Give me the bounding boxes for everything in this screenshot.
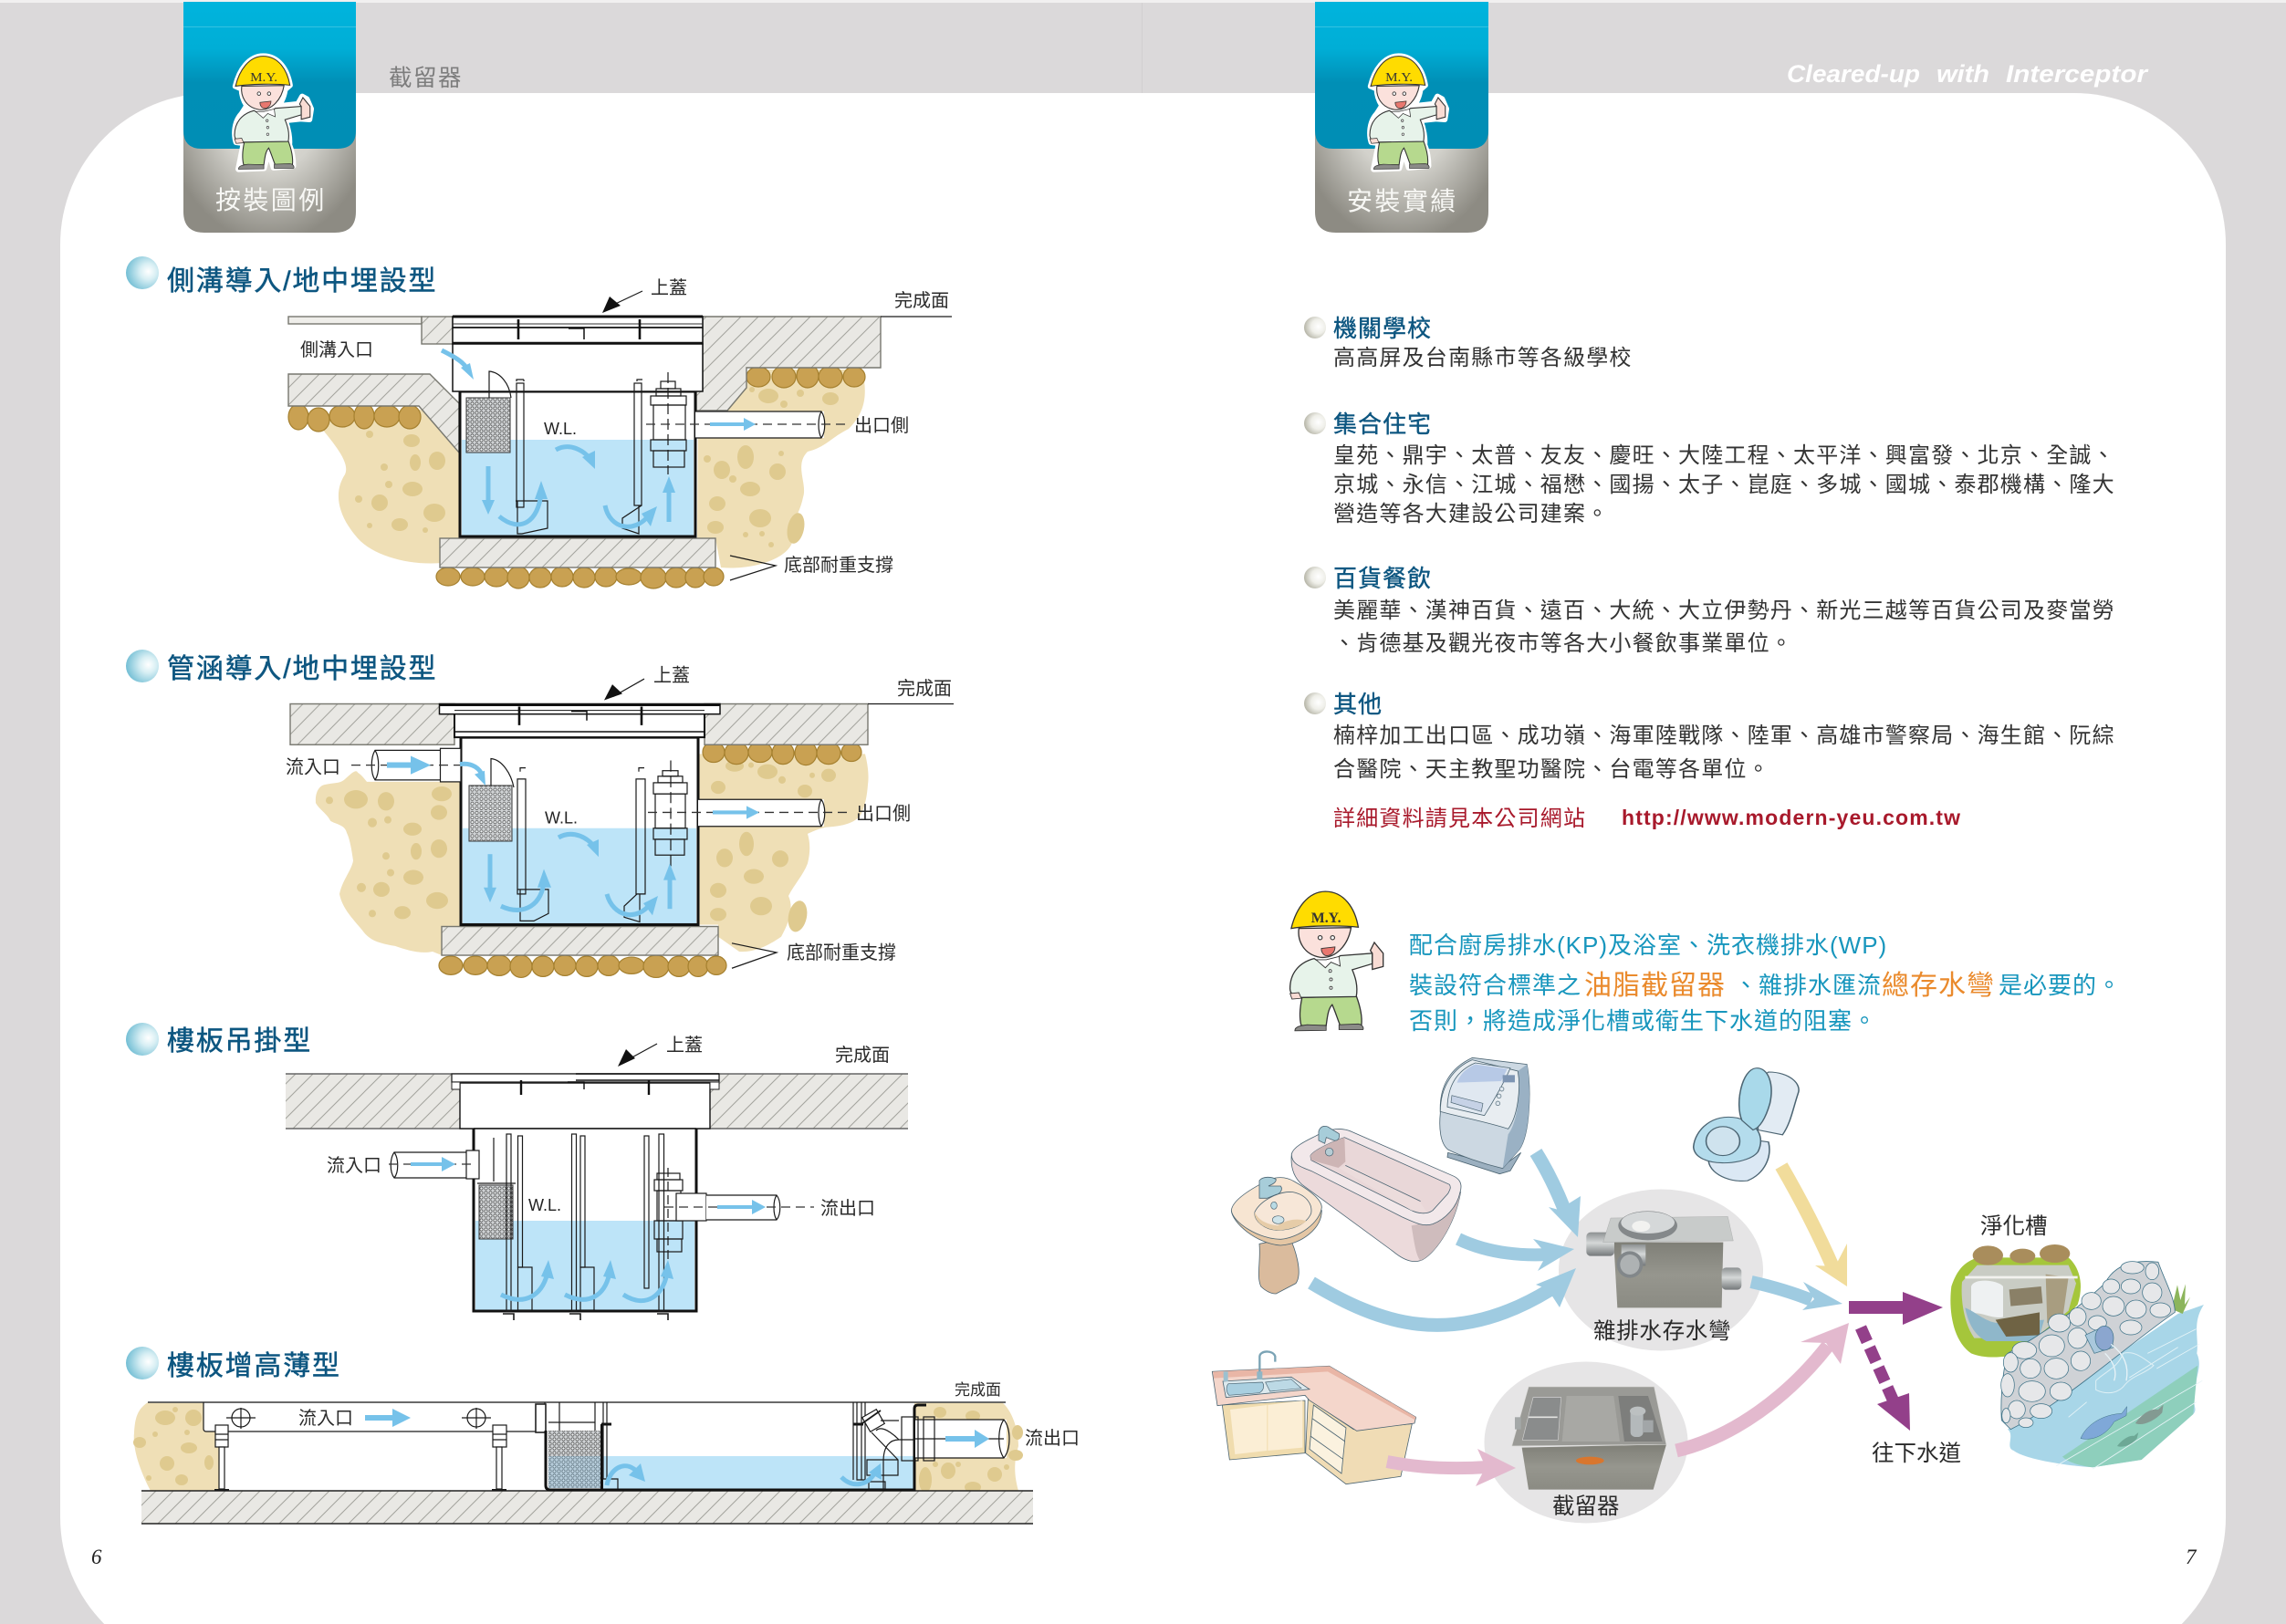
list: others: 合醫院、天主教聖功醫院、台電等各單位。 <box>1333 757 1770 782</box>
fitting <box>654 1168 683 1259</box>
icon: mascot: M.Y. <box>1385 70 1413 84</box>
flow arrows <box>460 764 676 915</box>
illustration: wash basin <box>1231 1177 1321 1294</box>
tank <box>461 737 698 924</box>
labels <box>300 277 949 576</box>
list: institutions and schools: 機關學校 <box>1333 315 1432 342</box>
labels: 完成面 <box>897 678 952 699</box>
diagram 1: side ditch inlet, underground <box>288 277 952 588</box>
stone wall <box>2001 1262 2175 1430</box>
right section tab <box>1315 2 1488 233</box>
callout text: 油脂截留器 <box>1584 971 1726 1001</box>
flow arrows <box>442 350 675 526</box>
left section tab <box>183 2 356 233</box>
lid arrow <box>627 1044 657 1060</box>
arrow: kitchen to interceptor <box>1387 1449 1516 1486</box>
inlet pipe <box>351 748 473 782</box>
callout text: 是必要的。 <box>1999 972 2122 999</box>
caption: 雜排水存水彎 <box>1593 1318 1731 1344</box>
list: others: 其他 <box>1333 691 1383 718</box>
list: retail and dining <box>1304 565 2115 656</box>
outlet pipe <box>902 1417 1009 1461</box>
label: purification tank: 淨化槽 <box>1980 1213 2048 1239</box>
diagram 4: raised thin type <box>133 1381 1080 1524</box>
callout text: 配合廚房排水(KP)及浴室、洗衣機排水(WP) <box>1409 932 1887 959</box>
callout text: 裝設符合標準之 <box>1409 972 1581 999</box>
heading: side ditch type: 側溝導入/地中埋設型 <box>167 266 437 297</box>
flow arrows <box>501 1260 673 1301</box>
illustration: washing machine <box>1440 1057 1529 1174</box>
page number 7: 7 <box>2186 1546 2197 1568</box>
callout text: 總存水彎 <box>1882 971 1995 1001</box>
illustration: toilet <box>1694 1068 1799 1181</box>
sand <box>134 1402 219 1491</box>
heading: slab hanging type <box>126 1023 312 1057</box>
list: residential: 集合住宅 <box>1333 411 1432 438</box>
diagram 2: culvert inlet, underground <box>286 665 954 977</box>
labels <box>286 665 952 963</box>
list: institutions and schools <box>1304 315 1633 370</box>
tab label: 按裝圖例 <box>215 186 327 214</box>
fish <box>2081 1407 2127 1439</box>
inner screen basket <box>466 398 510 453</box>
list: residential: 京城、永信、江城、福懋、國揚、太子、崑庭、多城、國城、泰郡機構、隆大 <box>1333 473 2115 497</box>
header title right: Interceptor <box>2006 60 2149 88</box>
cover and riser <box>452 1074 719 1129</box>
list: residential <box>1304 411 2115 526</box>
tank <box>460 391 695 536</box>
outlet pipe <box>648 799 851 827</box>
grass <box>2168 1284 2190 1314</box>
labels: 出口側 <box>854 415 909 436</box>
tab label: 安裝實績 <box>1347 187 1458 215</box>
caption: 截留器 <box>1552 1494 1619 1519</box>
floor <box>141 1491 1033 1524</box>
labels: W.L. <box>528 1196 561 1214</box>
ground slabs <box>290 704 868 955</box>
supports <box>214 1425 506 1490</box>
labels: W.L. <box>544 420 577 438</box>
outlet pipe <box>664 1193 814 1221</box>
outlet fitting <box>653 761 687 866</box>
baffles <box>517 768 645 921</box>
list: residential: 皇苑、鼎宇、太普、友友、慶旺、大陸工程、太平洋、興富發、北京、全誠、 <box>1333 443 2115 468</box>
inlet duct <box>204 1402 546 1432</box>
labels: 流入口 <box>298 1408 353 1429</box>
node: drain trap circle <box>1559 1190 1763 1350</box>
outfall pipe <box>2085 1326 2114 1353</box>
page number 6: 6 <box>91 1546 102 1568</box>
floor slab <box>286 1074 464 1129</box>
basket <box>548 1431 601 1488</box>
website note: 詳細資料請見本公司網站 <box>1333 807 1586 831</box>
ground and slabs <box>288 317 881 567</box>
icon: mascot <box>235 57 311 169</box>
website note: http://www.modern-yeu.com.tw <box>1622 806 1960 829</box>
heading: slab hanging type: 樓板吊掛型 <box>167 1026 312 1057</box>
labels: 流出口 <box>1025 1428 1080 1449</box>
mascot large <box>1290 891 1383 1031</box>
label lines <box>610 291 776 580</box>
arrow: to purification tank <box>1849 1292 1943 1325</box>
illustration: kitchen counter <box>1212 1351 1416 1484</box>
label lines <box>613 679 777 968</box>
labels: 上蓋 <box>651 277 687 298</box>
outlet fitting <box>651 372 686 474</box>
baffles <box>516 380 642 534</box>
heading: side ditch type <box>126 256 437 297</box>
list: others: 楠梓加工出口區、成功嶺、海軍陸戰隊、陸軍、高雄市警察局、海生館、阮綜 <box>1333 724 2115 748</box>
arrow: washer to drain trap <box>1536 1152 1581 1237</box>
water <box>2008 1305 2204 1467</box>
gravel <box>288 364 865 588</box>
inlet pipe <box>389 1150 479 1179</box>
list: institutions and schools: 高高屏及台南縣市等各級學校 <box>1333 346 1633 370</box>
labels: 完成面 <box>835 1045 890 1066</box>
tank cutaway <box>1950 1244 2081 1358</box>
header title left: 截留器 <box>389 66 463 91</box>
callout text <box>1409 932 2122 1035</box>
illustration: purification tank and river <box>1950 1244 2204 1469</box>
partitions <box>494 1134 668 1320</box>
website note <box>1333 806 1960 831</box>
heading: culvert type: 管涵導入/地中埋設型 <box>167 654 437 684</box>
list: retail and dining: 百貨餐飲 <box>1333 565 1432 592</box>
labels: 側溝入口 <box>300 339 373 360</box>
node: grease interceptor circle <box>1484 1361 1688 1524</box>
labels <box>327 1035 890 1219</box>
cover and riser <box>439 704 720 737</box>
top paper edge <box>0 0 2286 3</box>
arrow: bathtub to drain trap <box>1458 1239 1574 1271</box>
icon: mascot <box>1370 57 1446 169</box>
photo: drain trap box <box>1586 1211 1741 1307</box>
header title right: with <box>1936 60 1989 88</box>
callout text: 否則，將造成淨化槽或衛生下水道的阻塞。 <box>1409 1007 1877 1035</box>
list: retail and dining: 、肯德基及觀光夜市等各大小餐飲事業單位。 <box>1333 631 1793 656</box>
labels: 完成面 <box>894 290 949 311</box>
list: retail and dining: 美麗華、漢神百貨、遠百、大統、大立伊勢丹、新光三越等百貨公司及麥當勞 <box>1333 599 2115 623</box>
labels: 流入口 <box>286 757 340 778</box>
arrow: drain trap to junction <box>1751 1282 1842 1310</box>
labels: 上蓋 <box>653 665 690 686</box>
labels: 上蓋 <box>666 1035 703 1056</box>
illustration: bathtub <box>1291 1126 1461 1262</box>
arrow: toilet to junction <box>1781 1166 1847 1286</box>
labels: 流入口 <box>327 1155 381 1176</box>
heading: thin raised type: 樓板增高薄型 <box>167 1351 341 1381</box>
flow arrows <box>365 1409 882 1485</box>
header title right: Cleared-up <box>1787 60 1920 88</box>
labels: 流出口 <box>820 1198 875 1219</box>
gravel <box>439 741 861 977</box>
outlet pipe <box>646 411 849 438</box>
labels: 底部耐重支撐 <box>787 942 896 963</box>
icon: mascot: M.Y. <box>250 70 277 84</box>
diagram 3: slab suspended <box>286 1035 908 1320</box>
inner screen basket <box>469 786 512 841</box>
list: others <box>1304 691 2115 782</box>
label: to sewer: 往下水道 <box>1872 1441 1961 1466</box>
screen <box>479 1185 513 1239</box>
arrow: interceptor to junction <box>1676 1323 1849 1451</box>
arrow: basin to drain trap <box>1311 1268 1576 1325</box>
list: residential: 營造等各大建設公司建案。 <box>1333 502 1609 526</box>
outlet elbow <box>862 1410 995 1489</box>
cover and riser <box>453 317 703 391</box>
callout text: 、雜排水匯流 <box>1734 972 1882 999</box>
labels: 出口側 <box>856 803 911 825</box>
mascot large: M.Y. <box>1311 911 1341 926</box>
labels: W.L. <box>545 809 578 828</box>
header title right <box>1787 60 2149 88</box>
tank walls <box>546 1402 926 1490</box>
labels: 完成面 <box>955 1381 1001 1399</box>
labels <box>298 1381 1080 1449</box>
arrow: to sewer dashed <box>1861 1327 1910 1431</box>
tank <box>474 1129 696 1311</box>
tank water <box>602 1456 914 1489</box>
photo: grease interceptor <box>1512 1387 1666 1490</box>
labels: 底部耐重支撐 <box>784 555 893 576</box>
